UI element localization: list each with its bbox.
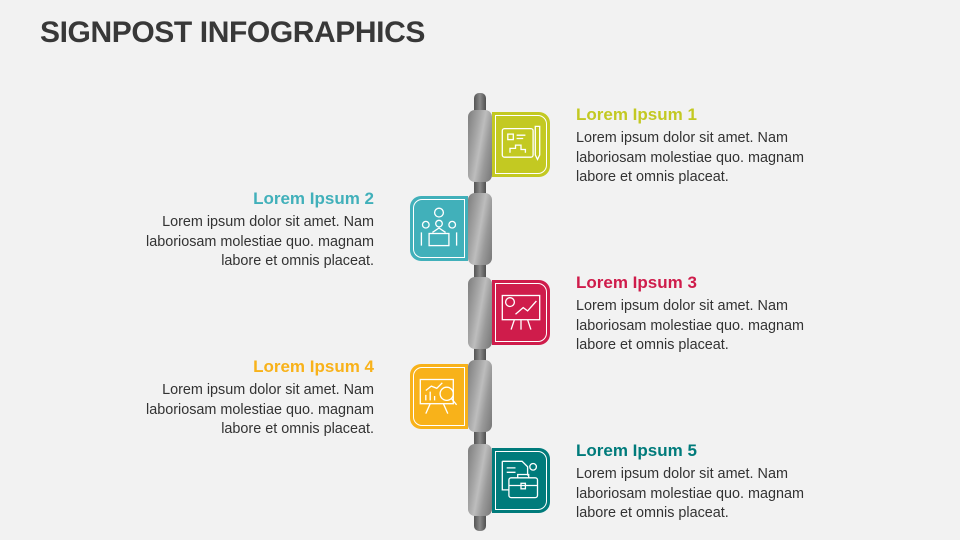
sign 5: briefcase icon — [492, 448, 550, 513]
text block 4 — [146, 357, 374, 437]
text block 3: Lorem Ipsum 3 — [576, 273, 697, 292]
text block 2 — [146, 189, 374, 269]
text block 5: Lorem ipsum dolor sit amet. Nam laboriosam molestiae quo. magnam labore et omnis placeat. — [576, 466, 804, 521]
sign 1: blueprint icon — [492, 112, 550, 177]
text block 4: Lorem Ipsum 4 — [253, 357, 374, 376]
text block 3: Lorem ipsum dolor sit amet. Nam laboriosam molestiae quo. magnam labore et omnis placeat. — [576, 298, 804, 353]
sign 2: meeting icon — [410, 196, 468, 261]
pole rod — [474, 93, 486, 531]
text block 1 — [576, 105, 804, 185]
text block 3 — [576, 273, 804, 353]
text block 4: Lorem ipsum dolor sit amet. Nam laboriosam molestiae quo. magnam labore et omnis placeat. — [146, 382, 374, 437]
sign 3: presentation icon — [492, 280, 550, 345]
text block 2: Lorem ipsum dolor sit amet. Nam laboriosam molestiae quo. magnam labore et omnis placeat. — [146, 214, 374, 269]
sign 4: analysis icon — [410, 364, 468, 429]
text block 1: Lorem Ipsum 1 — [576, 105, 697, 124]
text block 5: Lorem Ipsum 5 — [576, 441, 697, 460]
text block 1: Lorem ipsum dolor sit amet. Nam laboriosam molestiae quo. magnam labore et omnis placeat. — [576, 130, 804, 185]
text block 2: Lorem Ipsum 2 — [253, 189, 374, 208]
title: SIGNPOST INFOGRAPHICS — [40, 16, 425, 49]
text block 5 — [576, 441, 804, 521]
